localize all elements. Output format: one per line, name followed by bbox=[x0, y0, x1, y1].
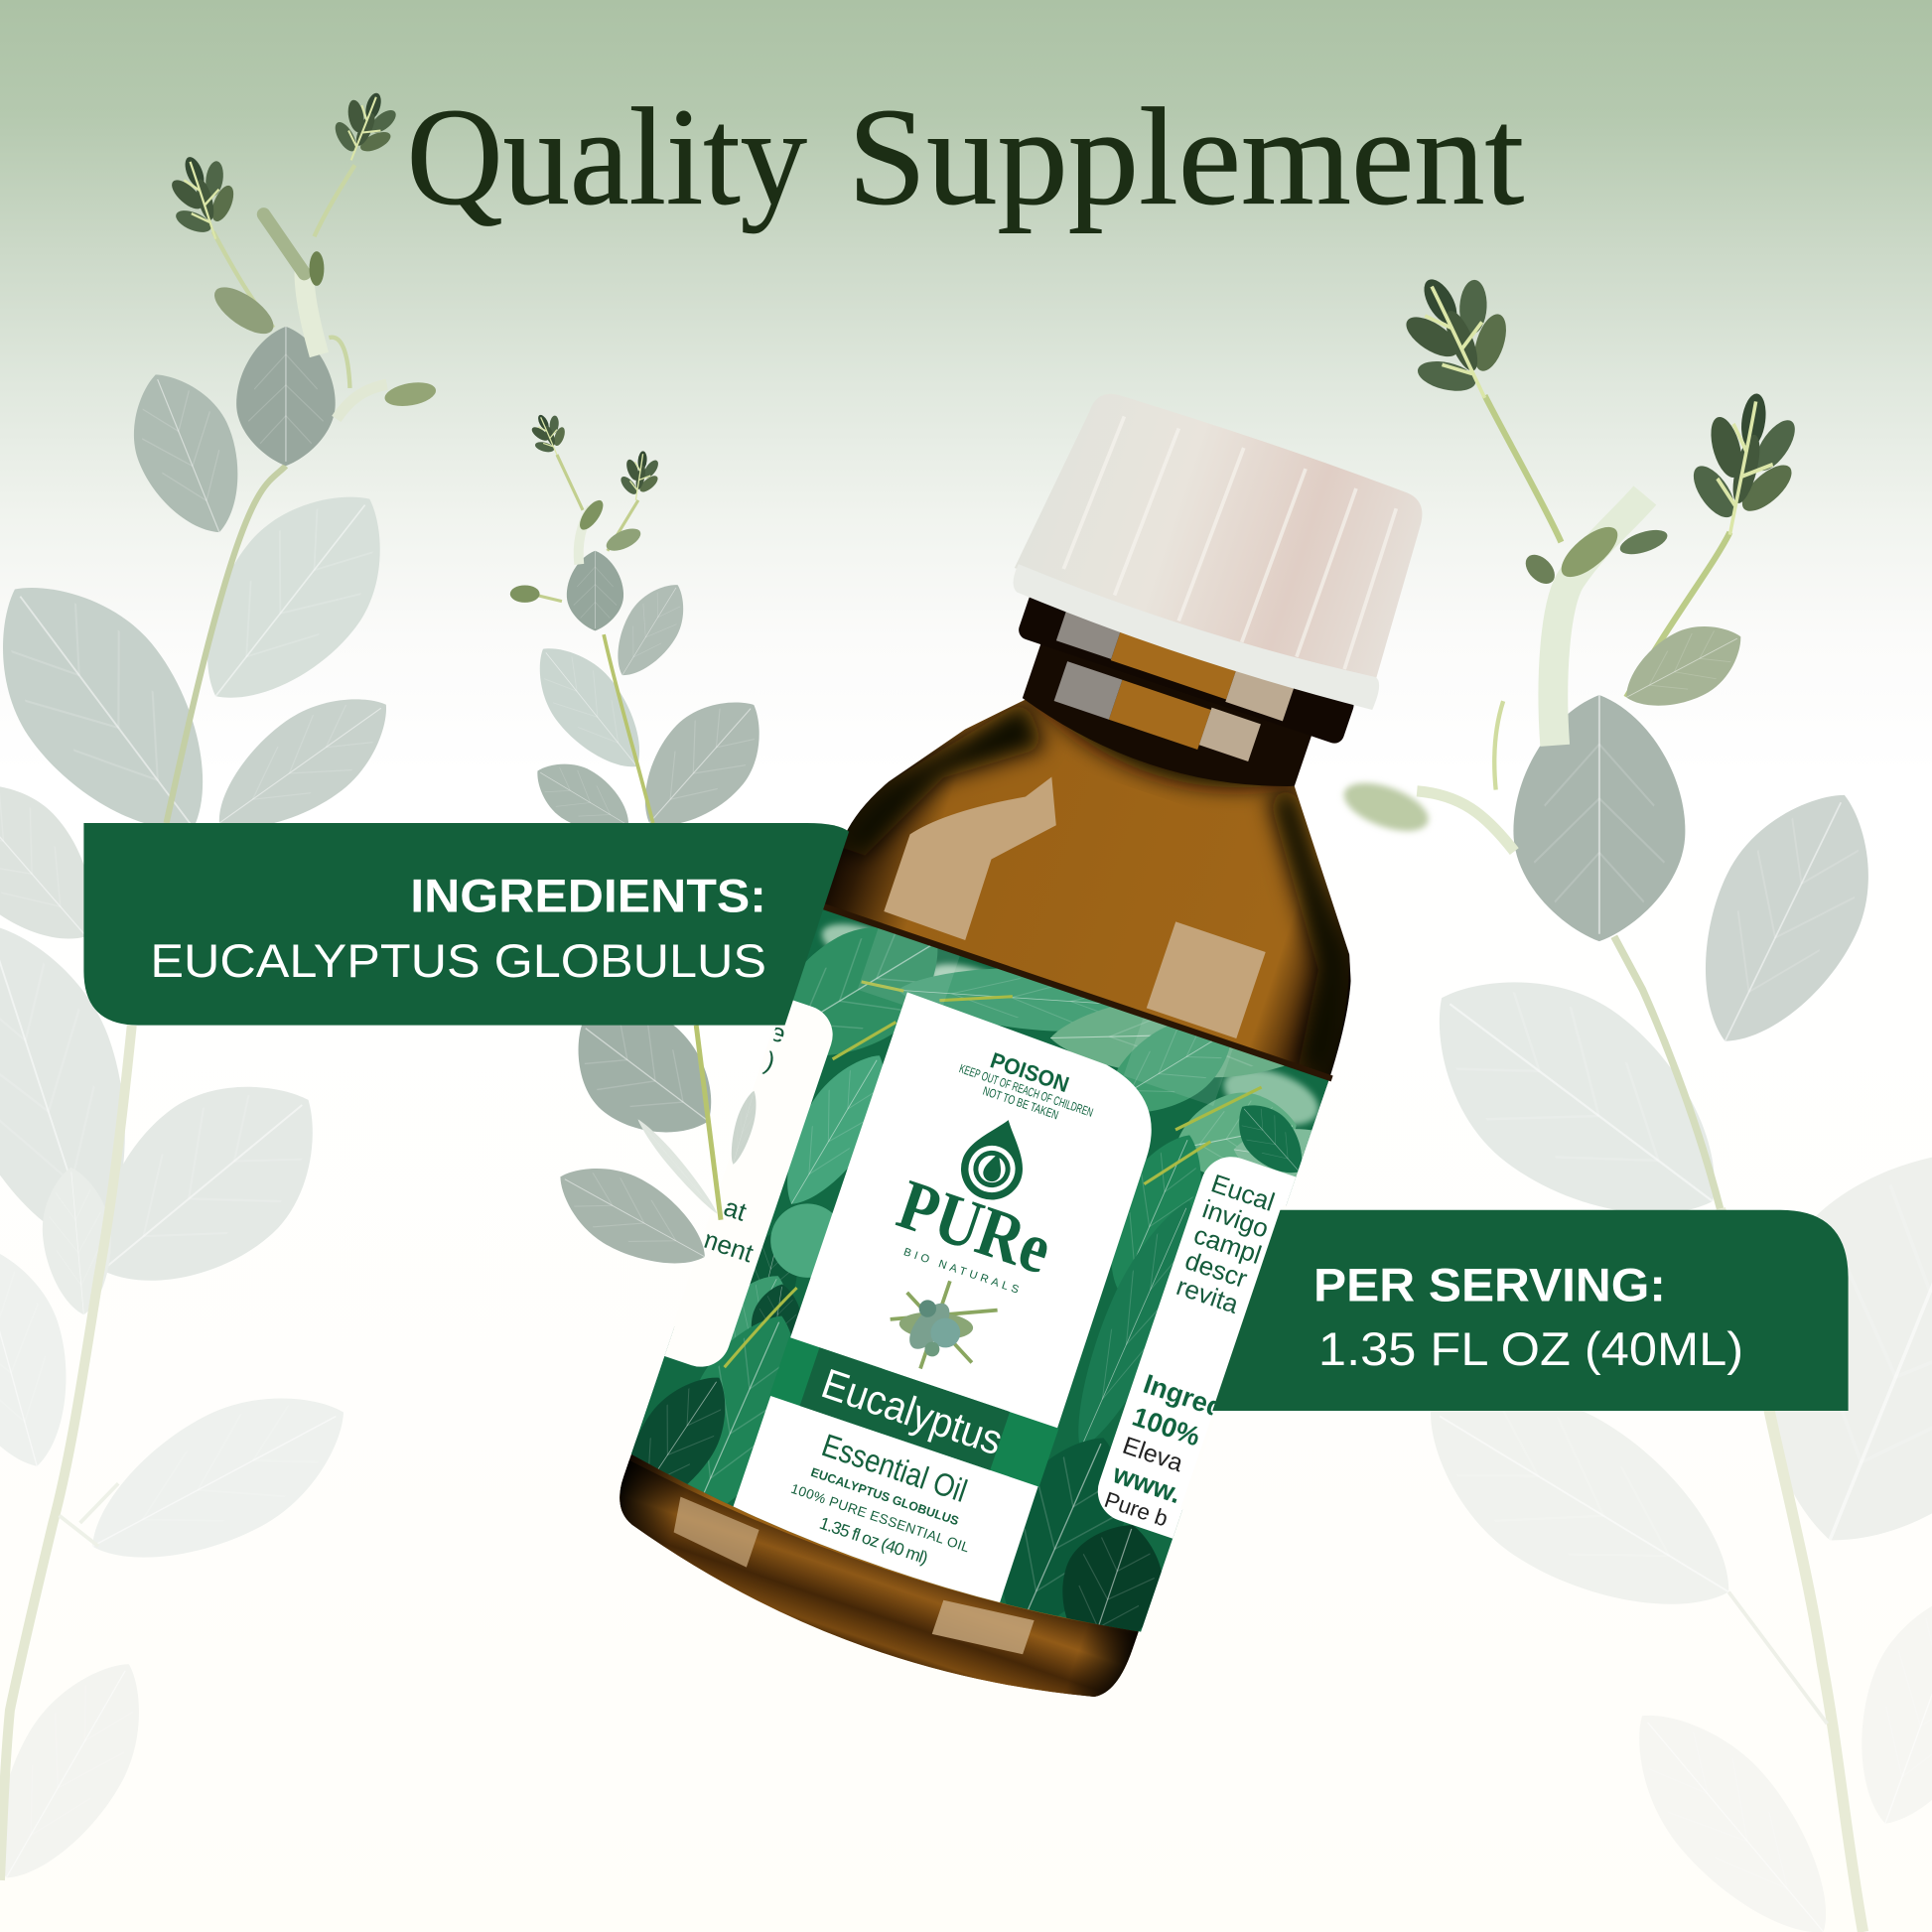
right label text bbox=[1104, 1174, 1275, 1525]
right label text: campl bbox=[1190, 1219, 1265, 1270]
bottle cap bbox=[1006, 379, 1444, 718]
botanical illustration bbox=[890, 1281, 998, 1370]
product details: Essential Oil bbox=[818, 1427, 971, 1509]
left label text bbox=[704, 1027, 784, 1263]
right label text: invigo bbox=[1199, 1193, 1273, 1244]
ingredients value: EUCALYPTUS GLOBULUS bbox=[150, 934, 766, 987]
eucalyptus branch: right bbox=[1337, 255, 1932, 1932]
right label text: Eucal bbox=[1207, 1169, 1279, 1217]
product bottle bbox=[620, 416, 1422, 1697]
right label text: 100% bbox=[1129, 1401, 1204, 1451]
poison warning: KEEP OUT OF REACH OF CHILDREN bbox=[957, 1061, 1095, 1120]
title: Supplement bbox=[848, 80, 1524, 234]
product details: 1.35 fl oz (40 ml) bbox=[817, 1513, 931, 1568]
right label text: Pure b bbox=[1101, 1487, 1172, 1532]
title: Quality bbox=[407, 80, 807, 234]
callout: ingredients bbox=[83, 823, 849, 1026]
callout: per serving bbox=[1212, 1210, 1849, 1411]
label shine bbox=[858, 925, 1234, 1110]
logo drop icon bbox=[961, 1120, 1023, 1199]
glass highlights bbox=[665, 739, 1297, 1665]
product name band bbox=[769, 1337, 1058, 1487]
shoulder shadow bbox=[581, 621, 1428, 1756]
per serving value: 1.35 FL OZ (40ML) bbox=[1318, 1322, 1743, 1375]
right label text: www. bbox=[1108, 1457, 1185, 1509]
eucalyptus branch: left bbox=[0, 80, 438, 1904]
right label text: descr bbox=[1181, 1245, 1251, 1294]
ingredients heading: INGREDIENTS: bbox=[410, 869, 766, 921]
product details: EUCALYPTUS GLOBULUS bbox=[809, 1465, 961, 1528]
per serving heading: PER SERVING: bbox=[1313, 1259, 1666, 1311]
product name band: Eucalyptus bbox=[816, 1360, 1009, 1464]
label edge cover bbox=[671, 1031, 1286, 1509]
right label text: Eleva bbox=[1119, 1433, 1186, 1477]
bottle base glass bbox=[620, 1459, 1138, 1697]
left label text: e bbox=[766, 1017, 789, 1049]
bottle neck bbox=[991, 583, 1359, 820]
bottle glass body bbox=[597, 653, 1415, 1729]
product details: 100% PURE ESSENTIAL OIL bbox=[789, 1481, 972, 1556]
left label panel bbox=[665, 1001, 833, 1367]
left label text: r at bbox=[705, 1186, 751, 1227]
poison warning bbox=[959, 1052, 1094, 1120]
right label text: revita bbox=[1173, 1271, 1243, 1319]
right label panel bbox=[1098, 1157, 1297, 1539]
title bbox=[407, 80, 1524, 234]
poison warning: POISON bbox=[987, 1047, 1072, 1097]
brand subtext: BIO NATURALS bbox=[902, 1246, 1021, 1297]
right label text: Ingred bbox=[1140, 1368, 1228, 1424]
poison warning: NOT TO BE TAKEN bbox=[981, 1084, 1060, 1122]
front label panel bbox=[728, 992, 1175, 1610]
left label text: ment bbox=[693, 1221, 758, 1269]
product details bbox=[790, 1434, 968, 1567]
top label groove bbox=[815, 903, 1332, 1078]
left label text: ) bbox=[761, 1045, 779, 1076]
eucalyptus branch: centre bbox=[510, 407, 787, 1290]
label leaf pattern bbox=[569, 805, 1426, 1711]
brand logo text: PURe bbox=[889, 1165, 1061, 1289]
wrap label bbox=[631, 909, 1328, 1632]
